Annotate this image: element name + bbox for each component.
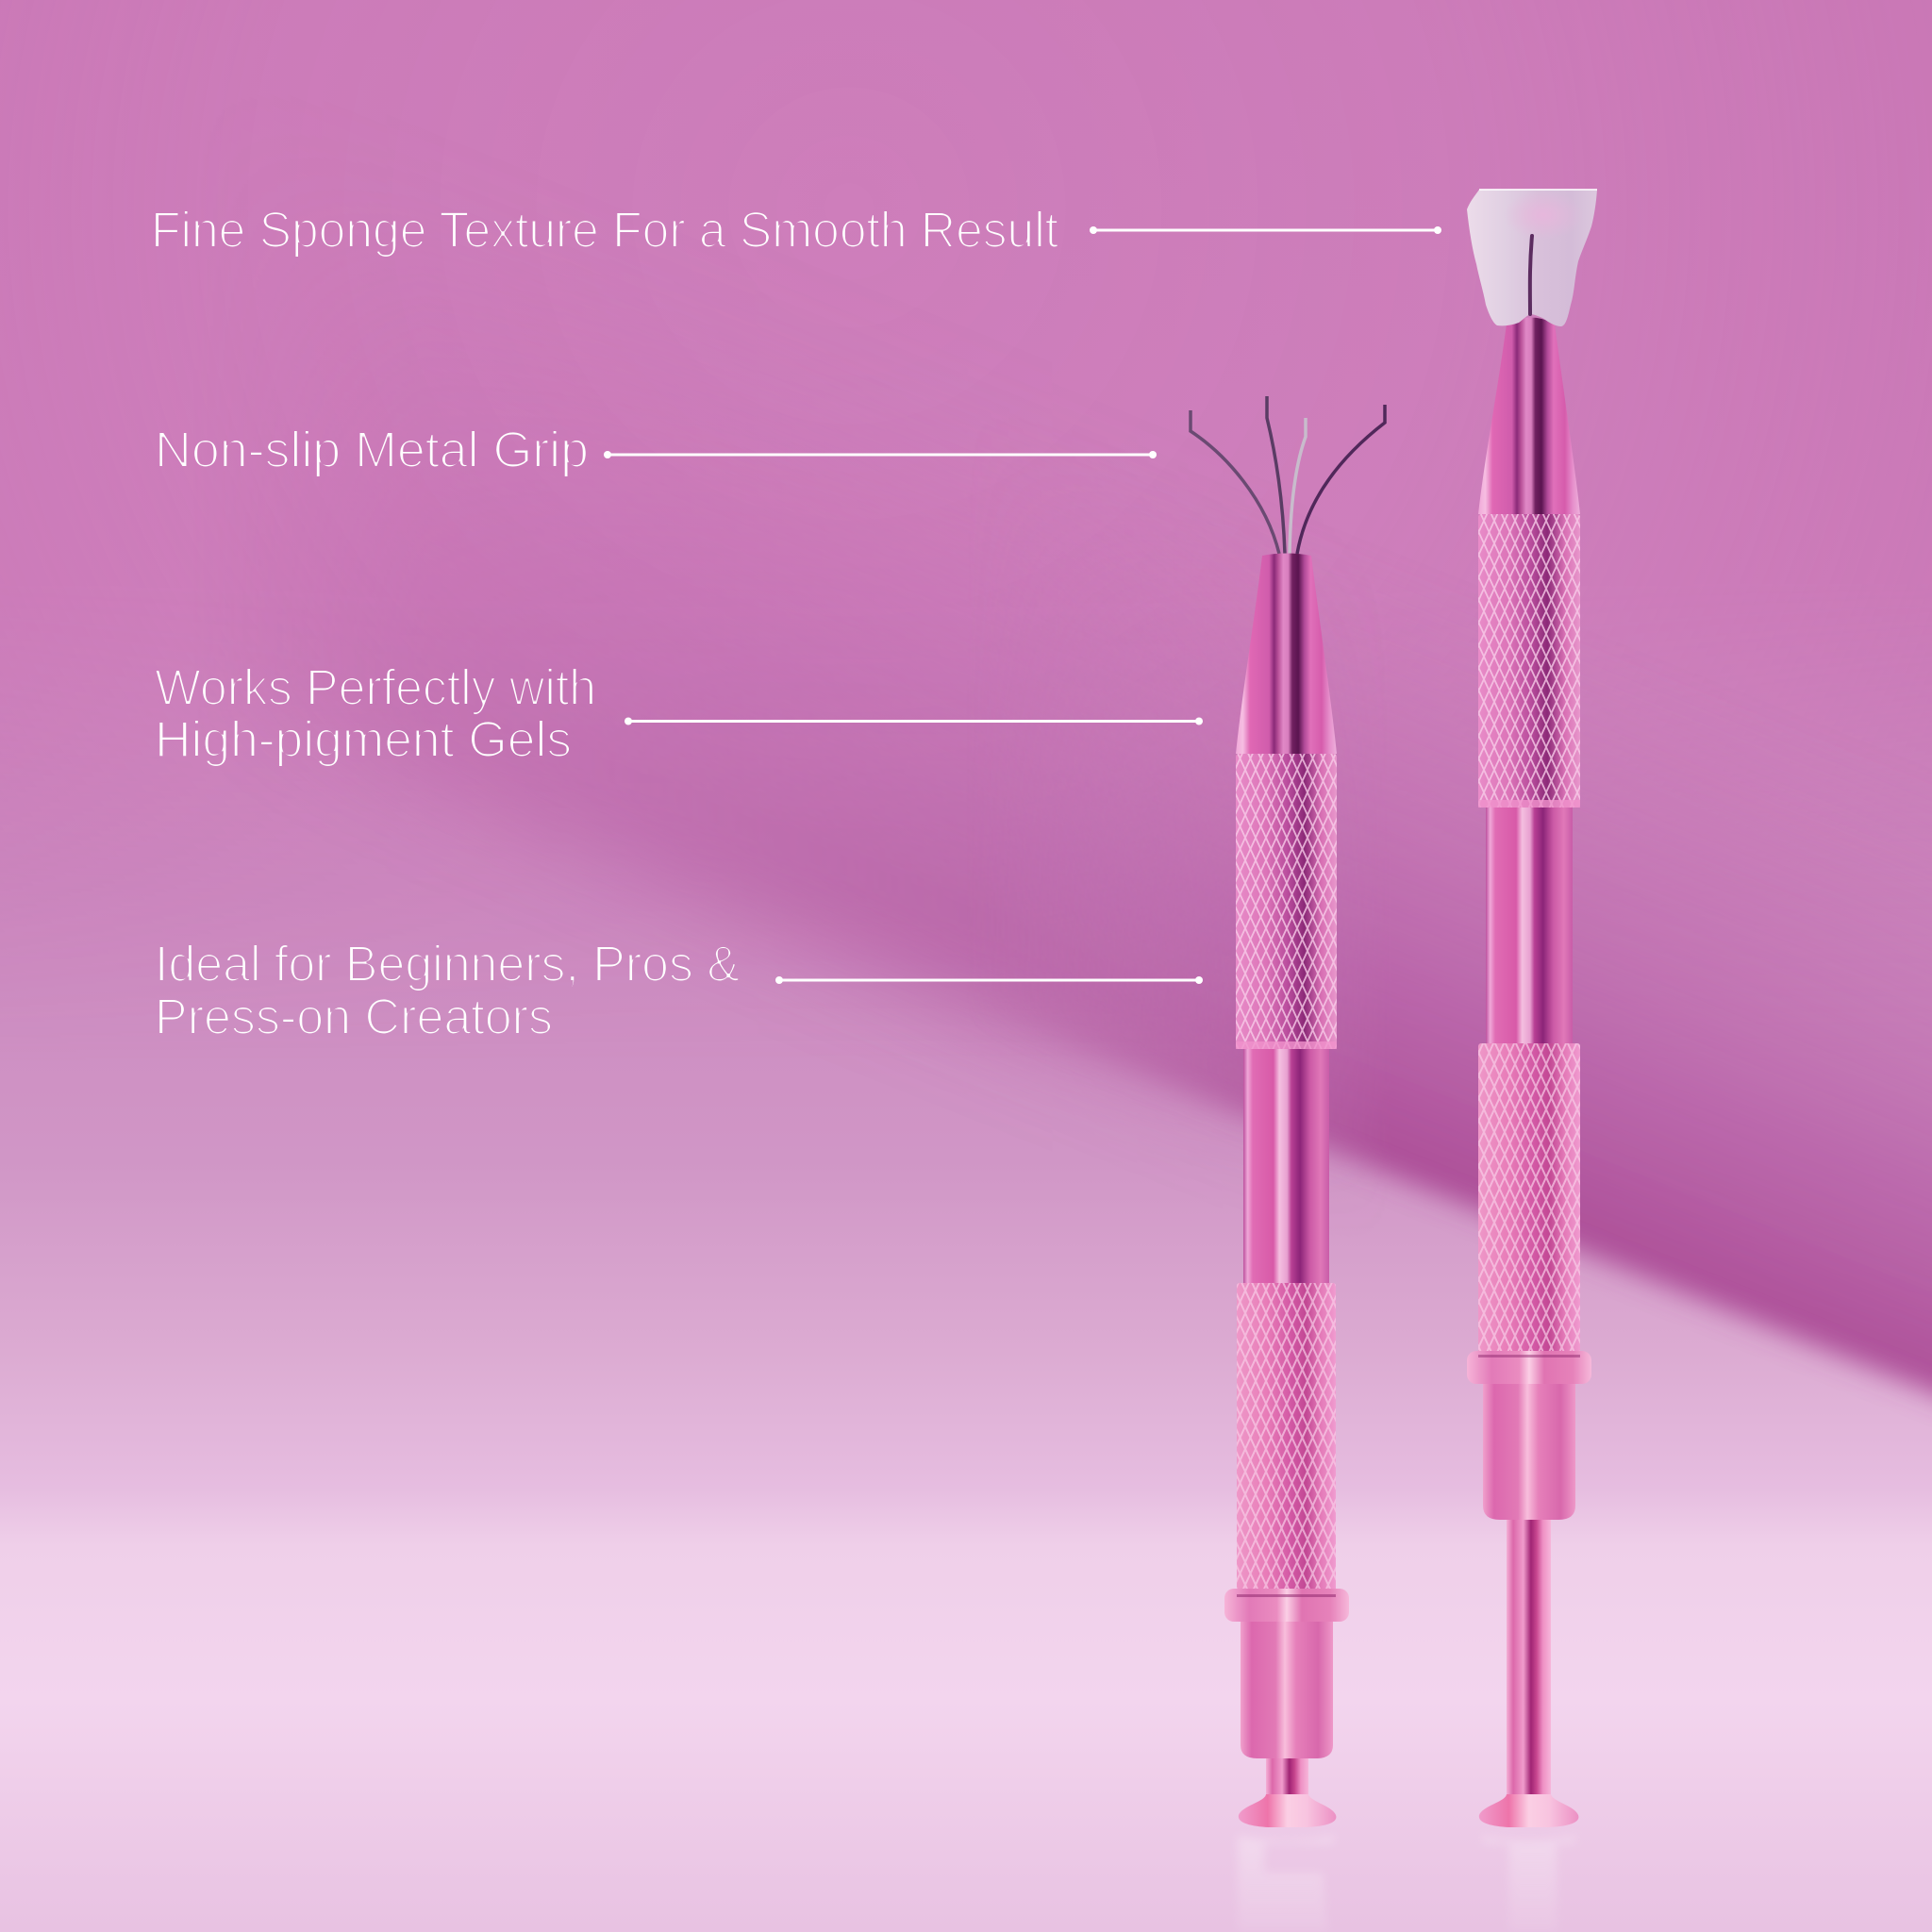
cylinder xyxy=(1241,1622,1333,1758)
label text xyxy=(155,659,596,768)
callout: high-pigment gels xyxy=(155,659,1203,768)
cone xyxy=(1236,553,1337,754)
lower knurled grip xyxy=(1237,1283,1336,1596)
label text xyxy=(155,936,740,1045)
upper knurled grip xyxy=(1478,514,1580,808)
flange xyxy=(1467,1351,1591,1384)
label text: Ideal for Beginners, Pros & xyxy=(155,936,740,992)
leader line xyxy=(775,976,1203,984)
lower knurled grip xyxy=(1478,1043,1580,1356)
reflection xyxy=(1238,1836,1336,1932)
rod xyxy=(1507,1520,1551,1796)
shaft xyxy=(1243,1049,1329,1283)
callout: non-slip metal grip xyxy=(155,422,1157,478)
wire prongs xyxy=(1191,396,1385,554)
label text: Non-slip Metal Grip xyxy=(155,422,589,478)
callout: fine sponge texture xyxy=(151,202,1441,258)
sponge tip xyxy=(1467,190,1597,326)
label text: High-pigment Gels xyxy=(155,711,572,768)
tool: left with wire prongs xyxy=(1191,396,1385,1932)
neck xyxy=(1266,1758,1308,1796)
callout: beginners, pros, creators xyxy=(155,936,1203,1045)
label text: Fine Sponge Texture For a Smooth Result xyxy=(151,202,1058,258)
label text: Works Perfectly with xyxy=(155,659,596,716)
foot xyxy=(1479,1794,1578,1827)
shaft xyxy=(1486,808,1573,1045)
leader line xyxy=(1090,226,1441,234)
foot xyxy=(1239,1794,1336,1827)
leader line xyxy=(604,451,1157,458)
upper knurled grip xyxy=(1236,754,1337,1049)
reflection xyxy=(1481,1836,1577,1932)
flange xyxy=(1224,1589,1349,1622)
tool: right with sponge tip xyxy=(1467,190,1597,1932)
leader line xyxy=(625,717,1203,724)
cylinder xyxy=(1483,1384,1575,1520)
label text: Press-on Creators xyxy=(155,989,553,1045)
cone xyxy=(1478,317,1580,514)
